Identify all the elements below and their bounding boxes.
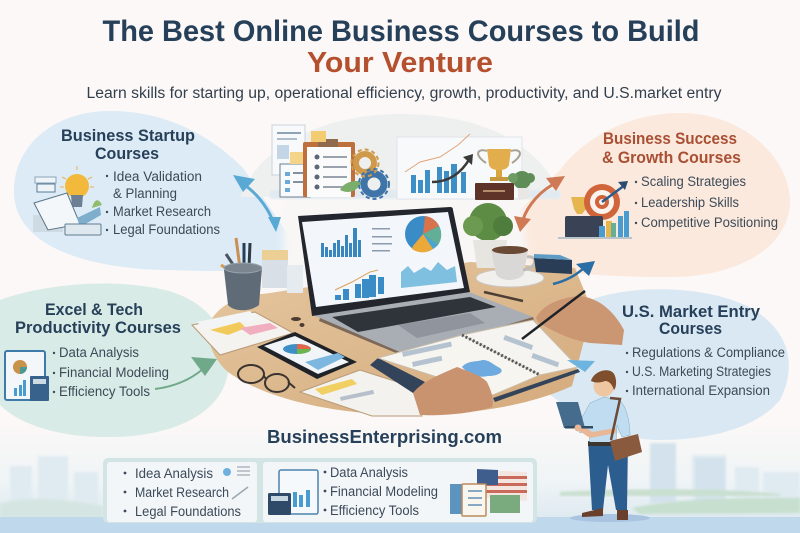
arrow: market bbox=[553, 261, 595, 284]
card: right: Financial Modeling bbox=[330, 484, 438, 499]
panel: success and growth: & Growth Courses bbox=[602, 149, 741, 167]
trophy bbox=[475, 149, 520, 200]
notebook under paper bbox=[300, 370, 422, 416]
card: left: Market Research bbox=[135, 485, 229, 500]
arrow: excel bbox=[155, 357, 217, 389]
bottom skyline scene bbox=[0, 425, 800, 533]
title bbox=[102, 15, 700, 79]
list: market bbox=[626, 345, 785, 398]
panel: excel and tech: Productivity Courses bbox=[15, 319, 181, 337]
screen bbox=[302, 212, 464, 307]
pie chart bbox=[405, 216, 441, 252]
list: success: Leadership Skills bbox=[641, 195, 739, 210]
pen cup bbox=[221, 238, 262, 310]
list: success: Scaling Strategies bbox=[641, 174, 746, 189]
website name: BusinessEnterprising.com bbox=[267, 427, 502, 447]
area chart bbox=[401, 262, 457, 288]
card: left: Legal Foundations bbox=[135, 504, 241, 519]
icon: target and briefcase bbox=[558, 181, 632, 239]
desk bbox=[208, 262, 592, 415]
icon: bulb and book bbox=[33, 166, 102, 235]
phone bbox=[257, 332, 357, 379]
screen frame bbox=[298, 207, 470, 316]
list: excel bbox=[53, 345, 169, 399]
panel: business startup: Business Startup bbox=[61, 127, 195, 145]
list: excel: Financial Modeling bbox=[59, 365, 169, 380]
list: success: Competitive Positioning bbox=[641, 215, 778, 230]
growth chart card bbox=[397, 134, 522, 199]
list: startup: Idea Validation bbox=[113, 169, 202, 184]
list: excel: Data Analysis bbox=[59, 345, 139, 360]
blob: excel and tech bbox=[0, 283, 228, 437]
list: success bbox=[635, 174, 778, 230]
blob: market entry bbox=[540, 289, 789, 440]
coffee cup and saucer bbox=[476, 246, 544, 287]
keyboard bbox=[332, 297, 496, 332]
list: excel: Efficiency Tools bbox=[59, 384, 150, 399]
list: startup: Market Research bbox=[113, 204, 211, 219]
icon: tablet dashboard and calculator bbox=[268, 470, 318, 515]
potted plant bbox=[463, 203, 513, 268]
small plant bbox=[508, 171, 535, 199]
gears bbox=[352, 150, 389, 199]
arrow: startup bbox=[233, 175, 281, 232]
panel: market entry: U.S. Market Entry bbox=[622, 303, 761, 321]
list: market: International Expansion bbox=[632, 383, 770, 398]
document bbox=[272, 125, 305, 175]
open spiral notebook bbox=[370, 320, 580, 402]
card: right: Data Analysis bbox=[330, 465, 408, 480]
arrow: success bbox=[514, 176, 565, 232]
panel: success and growth bbox=[558, 130, 778, 239]
list: startup: & Planning bbox=[113, 186, 177, 201]
dark box bbox=[534, 254, 572, 274]
laptop bbox=[298, 207, 534, 358]
writing hand and pen bbox=[522, 291, 624, 345]
trackpad bbox=[398, 313, 485, 338]
glasses bbox=[238, 365, 295, 392]
card: left bbox=[107, 462, 257, 522]
icon: tablet and calculator bbox=[5, 351, 49, 401]
central arch backdrop bbox=[240, 114, 562, 197]
blob: success and growth bbox=[520, 113, 790, 277]
panel: market entry: Courses bbox=[659, 320, 722, 338]
list: market: U.S. Marketing Strategies bbox=[632, 364, 771, 379]
panel: excel and tech bbox=[5, 301, 181, 401]
card: right: Efficiency Tools bbox=[330, 503, 419, 518]
arrow: light blue bbox=[557, 360, 595, 372]
dashboard top chart bbox=[321, 228, 361, 257]
coffee beans bbox=[291, 317, 304, 327]
list: market: Regulations & Compliance bbox=[632, 345, 785, 360]
panel: business startup: Courses bbox=[95, 145, 159, 163]
panel: market entry bbox=[622, 303, 785, 398]
title: Your Venture bbox=[307, 47, 493, 79]
paper stack bbox=[262, 250, 303, 293]
backdrop lower bbox=[283, 200, 528, 300]
dashboard lower bars bbox=[335, 275, 384, 300]
list: startup bbox=[106, 169, 220, 237]
blob: business startup bbox=[14, 111, 292, 271]
left papers with sticky notes bbox=[192, 311, 293, 355]
panel: excel and tech: Excel & Tech bbox=[45, 301, 143, 319]
subtitle: Learn skills for starting up, operational efficiency, growth, productivity, and U.S.market entry bbox=[86, 85, 722, 102]
pen bbox=[484, 292, 523, 301]
list: startup: Legal Foundations bbox=[113, 222, 220, 237]
icon: flag and documents bbox=[450, 469, 527, 516]
resting hand bbox=[413, 367, 493, 415]
panel: business startup bbox=[33, 127, 220, 237]
title: The Best Online Business Courses to Build bbox=[102, 15, 700, 48]
bottom panel bbox=[103, 458, 537, 523]
person with tablet bbox=[556, 370, 650, 522]
top shelf illustration bbox=[270, 125, 560, 200]
card: left: Idea Analysis bbox=[135, 466, 213, 481]
card: right bbox=[263, 462, 533, 522]
panel: success and growth: Business Success bbox=[603, 130, 737, 148]
clipboard bbox=[303, 131, 362, 197]
checklist form bbox=[280, 164, 310, 197]
